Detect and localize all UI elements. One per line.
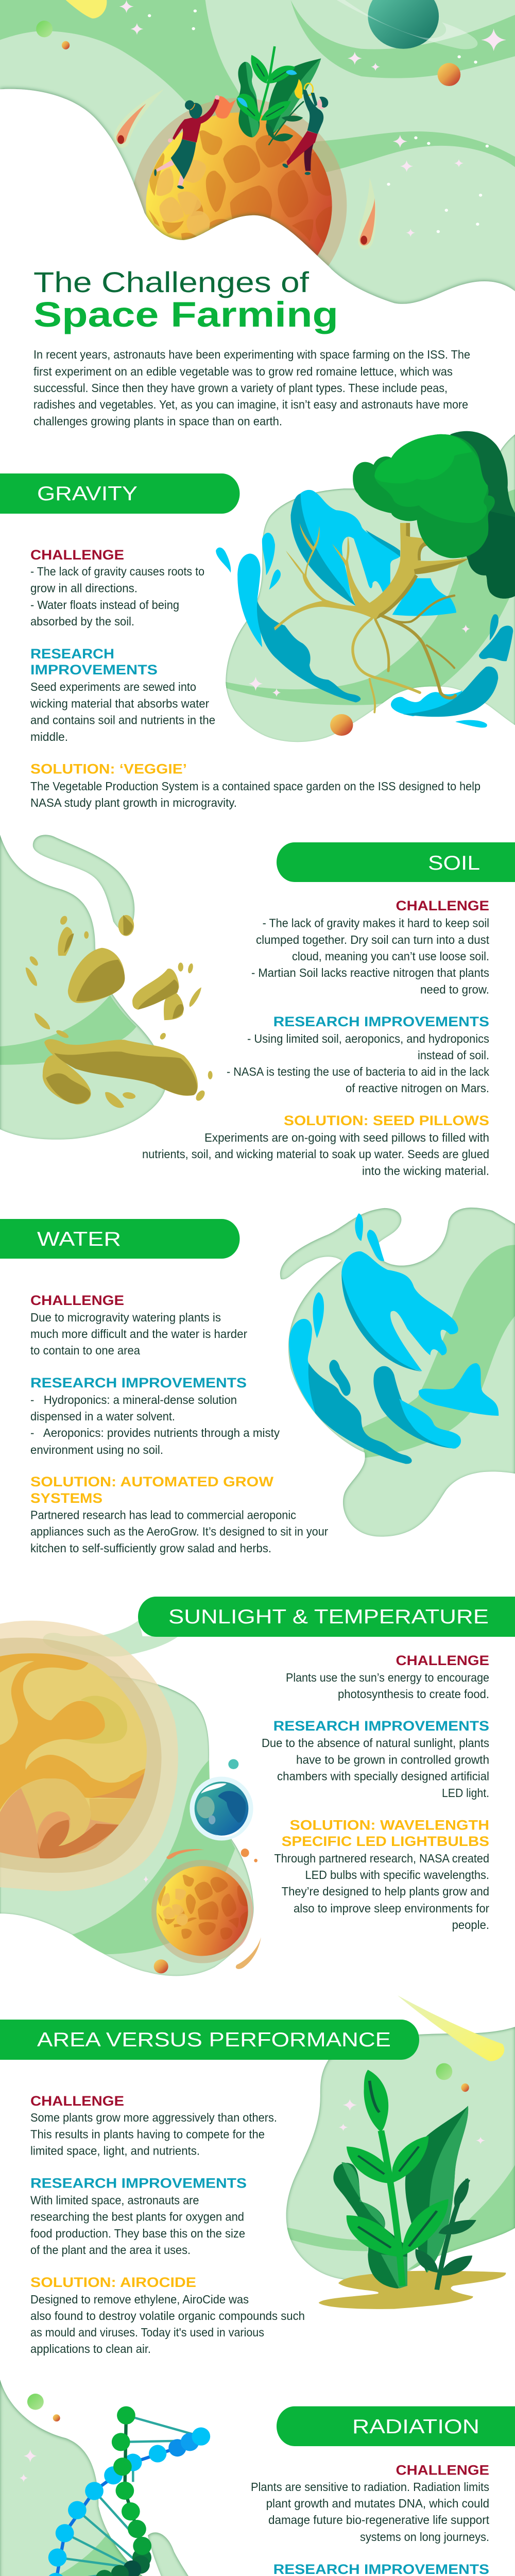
heading bar: radiation [277,2406,515,2446]
green blob [0,1663,254,1976]
solution text: kitchen to self-sufficiently grow salad and herbs. [30,1541,271,1555]
heading bar: area versus performance [0,2020,419,2060]
research text: instead of soil. [418,1048,489,1062]
icon: moon [228,1759,238,1769]
solution heading: SOLUTION: ‘VEGGIE’ [30,761,187,777]
research text: of the plant and the area it uses. [30,2243,191,2257]
research text: LED light. [442,1786,489,1800]
icon: small planets [27,2394,60,2421]
challenge text: damage future bio-regenerative life support [268,2513,489,2527]
illustration: plant on soil [283,1995,515,2309]
solution text: as mould and viruses. Today it's used in various [30,2326,264,2339]
solution text [30,1509,328,1555]
research heading: RESEARCH [30,646,114,662]
challenge text: - The lack of gravity makes it hard to keep soil [263,916,489,929]
icon: sun [0,1621,178,1891]
challenge text: absorbed by the soil. [30,615,134,628]
blob mid tone [72,1760,235,1954]
research text: wicking material that absorbs water [30,697,209,710]
illustration: water splash [280,1208,515,1537]
solution text: The Vegetable Production System is a contained space garden on the ISS designed to help [30,779,480,793]
challenge text [30,565,204,628]
challenge text: to contain to one area [30,1344,141,1357]
challenge text: plant growth and mutates DNA, which could [266,2497,489,2510]
challenge text [251,2480,489,2544]
icon: orange planet [330,714,353,736]
blob arm [33,835,134,930]
heading bar: area versus performance: AREA VERSUS PERFORMANCE [37,2029,391,2051]
icon: earth [190,1776,253,1841]
soil patch [319,2271,506,2309]
heading bar: soil [277,842,515,882]
solution heading: SOLUTION: WAVELENGTH [289,1818,489,1833]
solution text: Designed to remove ethylene, AiroCide was [30,2293,249,2306]
heading bar: water: WATER [37,1228,121,1250]
roots [274,523,468,713]
research heading: RESEARCH IMPROVEMENTS [273,1718,489,1734]
challenge text [251,916,489,996]
challenge text: grow in all directions. [30,581,138,595]
solution text: They’re designed to help plants grow and [282,1885,489,1898]
title: Space Farming [33,295,338,334]
challenge heading: CHALLENGE [396,898,489,913]
sparkles [249,624,470,697]
DNA blue strand [47,2428,210,2576]
challenge text: - Martian Soil lacks reactive nitrogen that plants [251,966,489,979]
solution text: NASA study plant growth in microgravity. [30,796,237,809]
intro text: radishes and vegetables. Yet, as you can imagine, it isn’t easy and astronauts have more [33,398,468,411]
challenge text: - Water floats instead of being [30,598,179,612]
text block: water [30,1293,328,1555]
challenge text: systems on long journeys. [360,2530,489,2544]
solution text: Experiments are on-going with seed pillows to filled with [204,1131,489,1144]
solution text: also found to destroy volatile organic compounds such [30,2309,305,2323]
solution heading: SOLUTION: SEED PILLOWS [284,1113,489,1128]
challenge heading: CHALLENGE [30,547,124,563]
challenge text: This results in plants having to compete for the [30,2128,265,2141]
solution text [274,1852,489,1931]
challenge text: photosynthesis to create food. [338,1687,489,1701]
blob arm [43,1620,179,1656]
green blob [0,835,166,1140]
text block: radiation [141,2463,490,2576]
solution text: applications to clean air. [30,2342,151,2355]
icon: ringed planet [337,0,477,49]
research text: middle. [30,730,68,743]
intro text: challenges growing plants in space than on earth. [33,414,282,428]
research text: environment using no soil. [30,1443,163,1456]
research text [30,680,215,743]
challenge text: Plants are sensitive to radiation. Radiation limits [251,2480,489,2494]
panel: hero illustration [0,0,515,464]
research heading: IMPROVEMENTS [30,662,158,677]
solution text [142,1131,489,1178]
research text: have to be grown in controlled growth [296,1753,489,1766]
solution heading [282,1818,489,1849]
illustration: DNA helix [0,2380,210,2576]
intro text: successful. Since then they have grown a variety of plant types. These include peas, [33,381,448,395]
text block: sunlight [262,1653,489,1931]
text block: gravity [30,547,480,809]
illustration: gravity roots and tree [216,431,515,742]
green blob [280,1208,515,1537]
challenge text: clumped together. Dry soil can turn into a dust [256,933,489,946]
challenge text: Due to microgravity watering plants is [30,1311,221,1324]
research text [30,2194,245,2257]
solution text: also to improve sleep environments for [294,1902,489,1915]
planet, plants and astronauts [131,46,347,313]
heading bar: sunlight and temperature [138,1597,515,1637]
DNA green strand [0,2406,151,2576]
text block: area [30,2093,305,2355]
green blob [0,2380,143,2576]
research text: researching the best plants for oxygen and [30,2210,244,2224]
green blob [225,434,515,742]
research text: of reactive nitrogen on Mars. [346,1081,489,1095]
challenge text: need to grow. [420,983,489,996]
challenge text [286,1671,489,1701]
DNA rungs [0,2415,201,2576]
icon: comet [398,1995,504,2061]
solution text [30,779,480,809]
water splashes [216,490,513,727]
solution text: into the wicking material. [362,1164,489,1178]
solution text: Through partnered research, NASA created [274,1852,489,1865]
icon: planet Mars [131,98,347,313]
research text [30,1393,280,1456]
research text: - NASA is testing the use of bacteria to aid in the lack [227,1065,489,1078]
research text: food production. They base this on the size [30,2227,245,2240]
research text: dispensed in a water solvent. [30,1410,175,1423]
soil clumps [26,915,213,1108]
challenge text: cloud, meaning you can’t use loose soil. [292,950,489,963]
tree canopy [353,431,515,599]
challenge heading: CHALLENGE [396,1653,489,1668]
solution text: LED bulbs with specific wavelengths. [305,1868,489,1882]
challenge text: limited space, light, and nutrients. [30,2144,200,2158]
water shapes [289,1213,499,1464]
research text: With limited space, astronauts are [30,2194,199,2207]
icon: small planets [36,21,460,86]
challenge heading: CHALLENGE [30,2093,124,2109]
research text: - Hydroponics: a mineral-dense solution [30,1393,237,1406]
challenge text: Plants use the sun’s energy to encourage [286,1671,489,1684]
icon: man with watering can [282,79,328,175]
heading bar: gravity: GRAVITY [37,483,138,505]
challenge text: Some plants grow more aggressively than others. [30,2111,277,2124]
solution heading: SYSTEMS [30,1490,102,1506]
heading bar: sunlight and temperature: SUNLIGHT & TEMPERATURE [168,1606,489,1628]
intro text: first experiment on an edible vegetable was to grow red romaine lettuce, which was [33,365,453,378]
solution text: Partnered research has lead to commercial aeroponic [30,1509,296,1522]
research text: - Using limited soil, aeroponics, and hydroponics [247,1032,489,1045]
green blob [283,2027,515,2281]
challenge text [30,2111,277,2158]
title: The Challenges of [33,266,310,298]
illustration: sun and planets [0,1620,261,1976]
research text [227,1032,489,1095]
icon: plants [236,46,321,145]
solution heading: SOLUTION: AUTOMATED GROW [30,1474,273,1489]
heading bar: soil: SOIL [428,852,480,874]
intro text [33,348,470,428]
research text [262,1736,489,1800]
icon: Mars small [151,1860,253,1963]
icon: small planets [436,2063,469,2092]
icon: woman with watering can [154,95,236,190]
hero background [0,0,515,325]
challenge text: much more difficult and the water is harder [30,1327,247,1341]
icon: small bodies and comets [143,1849,261,1973]
research text: Due to the absence of natural sunlight, plants [262,1736,489,1750]
blob arm [148,2532,205,2576]
research heading: RESEARCH IMPROVEMENTS [30,2175,247,2191]
challenge heading: CHALLENGE [30,1293,124,1308]
soil clump shading [46,915,197,1104]
intro text: In recent years, astronauts have been experimenting with space farming on the ISS. The [33,348,470,361]
research heading: RESEARCH IMPROVEMENTS [273,1014,489,1029]
solution text: nutrients, soil, and wicking material to soak up water. Seeds are glued [142,1147,489,1161]
research text: Seed experiments are sewed into [30,680,196,693]
solution heading: SOLUTION: AIROCIDE [30,2275,196,2290]
challenge text [30,1311,247,1357]
research text: - Aeroponics: provides nutrients through a misty [30,1426,280,1439]
research text: chambers with specially designed artificial [277,1770,489,1783]
illustration: soil clumps [0,835,213,1140]
solution heading [30,1474,273,1506]
research heading [30,646,158,677]
heading bar: gravity [0,473,240,514]
research heading: RESEARCH IMPROVEMENTS [30,1375,247,1391]
heading bar: water [0,1219,240,1259]
challenge text: - The lack of gravity causes roots to [30,565,204,578]
sparkles [20,2449,37,2482]
white page curve [0,89,515,464]
sparkles [119,0,506,237]
title [33,266,338,334]
sparkles [339,2099,485,2144]
icon: comets [113,89,376,249]
icon: yellow comet [66,0,107,19]
challenge heading: CHALLENGE [396,2463,489,2478]
solution text: people. [452,1918,489,1931]
heading bar: radiation: RADIATION [352,2416,479,2438]
solution text [30,2293,305,2355]
text block: soil [142,898,489,1178]
solution heading: SPECIFIC LED LIGHTBULBS [282,1834,489,1849]
plant [333,2070,476,2290]
solution text: appliances such as the AeroGrow. It’s designed to sit in your [30,1525,328,1538]
research text: and contains soil and nutrients in the [30,714,215,727]
